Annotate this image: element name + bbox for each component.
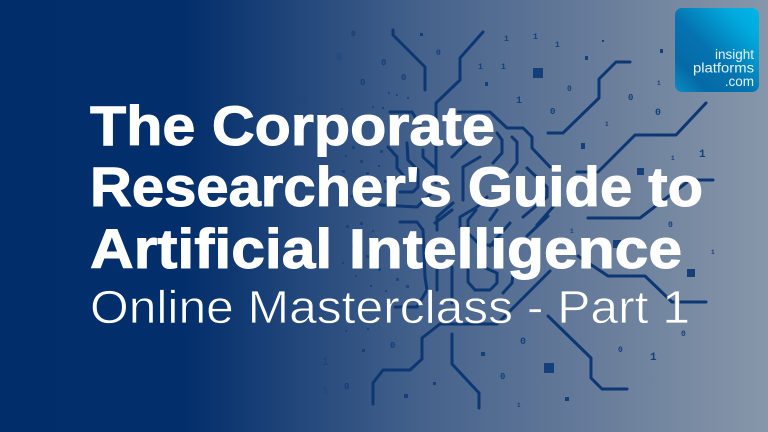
binary digits and chips: 0 — [550, 107, 555, 117]
binary digits and chips: 0 — [520, 337, 526, 348]
title — [90, 94, 703, 280]
binary digits and chips: 1 — [302, 95, 309, 107]
logo badge: insight — [715, 47, 754, 62]
binary digits and chips: 1 — [322, 357, 329, 369]
binary digits and chips: 1 — [478, 63, 483, 72]
binary digits and chips: 0 — [628, 93, 633, 103]
binary digits and chips: 1 — [516, 96, 522, 107]
binary digits and chips: 1 — [570, 228, 574, 235]
binary digits and chips: 1 — [699, 149, 706, 161]
binary digits and chips: 1 — [517, 402, 521, 409]
binary digits and chips — [302, 30, 715, 409]
binary digits and chips: 0 — [336, 52, 343, 64]
binary digits and chips: 1 — [605, 121, 609, 128]
circuit brain illustration — [373, 30, 713, 408]
logo badge — [675, 8, 759, 92]
particle dust — [328, 92, 409, 332]
title line 1: The Corporate — [90, 94, 495, 157]
binary digits and chips: 0 — [618, 346, 623, 355]
logo badge: .com — [725, 74, 754, 89]
binary digits and chips: 1 — [555, 41, 560, 50]
binary digits and chips: 1 — [650, 352, 657, 364]
binary digits and chips: 0 — [381, 58, 386, 68]
binary digits and chips: 1 — [501, 63, 506, 72]
binary digits and chips: 1 — [711, 249, 715, 256]
binary digits and chips: 0 — [655, 108, 661, 119]
binary digits and chips: 0 — [360, 78, 365, 88]
binary digits and chips: 0 — [668, 221, 673, 230]
binary digits and chips: 1 — [533, 33, 538, 42]
binary digits and chips: 1 — [504, 35, 509, 44]
binary digits and chips: 1 — [657, 80, 661, 87]
binary digits and chips: 1 — [671, 155, 675, 162]
binary digits and chips: 0 — [351, 30, 356, 39]
binary digits and chips: 0 — [436, 49, 441, 58]
binary digits and chips: 0 — [681, 330, 686, 339]
title line 2: Researcher's Guide to — [90, 155, 703, 218]
binary digits and chips: 0 — [401, 73, 406, 83]
logo badge: platforms — [693, 60, 754, 76]
binary digits and chips: 0 — [390, 341, 395, 351]
title line 3: Artificial Intelligence — [90, 217, 682, 280]
subtitle: Online Masterclass - Part 1 — [90, 281, 690, 333]
binary digits and chips: 0 — [567, 85, 572, 94]
binary digits and chips: 1 — [322, 386, 329, 398]
binary digits and chips: 0 — [500, 372, 505, 382]
binary digits and chips: 0 — [344, 382, 349, 392]
